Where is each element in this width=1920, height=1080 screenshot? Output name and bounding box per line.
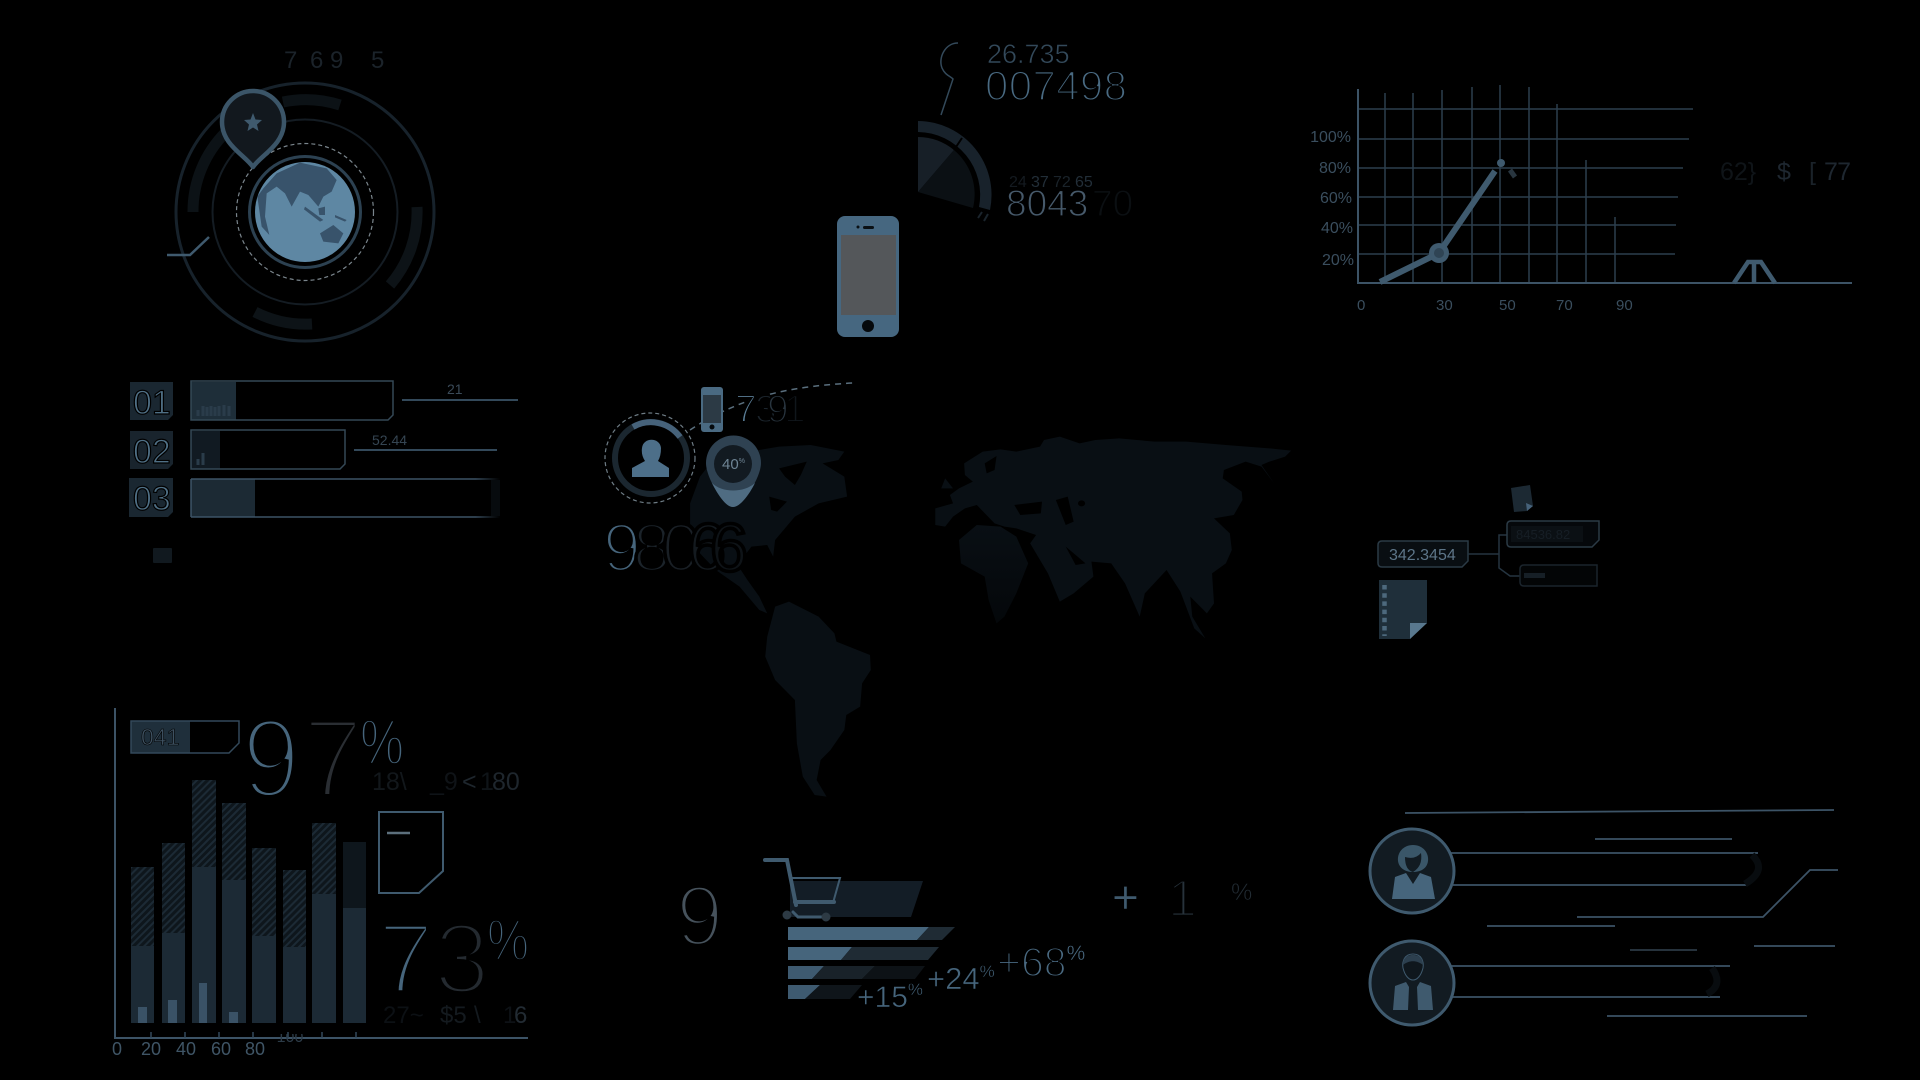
row 01: 21 xyxy=(447,381,463,397)
connector lines xyxy=(1405,810,1838,1016)
numbers: 98066: 6 xyxy=(710,510,748,586)
icon: percent pin xyxy=(706,435,761,507)
faint arcs xyxy=(1707,855,1759,994)
panel: phone and pie xyxy=(837,39,1133,337)
panel: data tree xyxy=(1378,485,1599,639)
numbers: 98066: 9 xyxy=(603,510,641,586)
x axis labels: 30 xyxy=(1436,297,1453,314)
stat: 73 percent: 3 xyxy=(434,903,490,1015)
backing parallelogram xyxy=(790,881,923,917)
numbers: 27 $5 16: $5 xyxy=(440,1002,467,1029)
hatched bars xyxy=(131,780,336,947)
stat: 97 percent: 7 xyxy=(303,696,363,821)
avatar: woman xyxy=(1370,829,1454,913)
numbers: 804370: 70 xyxy=(1092,183,1133,224)
numbers: 62} $ [ 77 xyxy=(1720,158,1851,186)
numbers: 791: 1 xyxy=(784,388,806,431)
pie gauge xyxy=(918,121,992,221)
numbers: 18 9 180: 80 xyxy=(492,768,520,796)
panel: ranked bars xyxy=(129,381,518,563)
counter: 7 6 9 5 xyxy=(284,47,384,74)
numbers: big 9: 9 xyxy=(676,869,723,964)
x axis labels: 40 xyxy=(176,1039,196,1059)
dashed route xyxy=(690,383,853,430)
stacked bars xyxy=(788,927,955,999)
row 02 xyxy=(130,430,497,471)
panel: bar chart stats xyxy=(112,696,529,1059)
stat: +24%: % xyxy=(980,962,995,981)
numbers: 62} $ [ 77: [ xyxy=(1809,158,1816,186)
icon: small note xyxy=(1511,485,1533,512)
icon: small smartphone xyxy=(701,387,723,432)
fading bar cap xyxy=(343,842,366,908)
stat: +15%: % xyxy=(908,980,923,999)
stat: +1x%: 1 xyxy=(1168,870,1197,928)
counter: 7 6 9 5: 5 xyxy=(371,47,384,74)
icon: person xyxy=(632,440,669,477)
axes xyxy=(115,708,528,1038)
x axis labels: 0 xyxy=(112,1039,122,1059)
stat: 73 percent: 7 xyxy=(378,903,434,1015)
axes xyxy=(1358,89,1852,283)
line chart panel xyxy=(1310,85,1852,314)
counter: 7 6 9 5: 7 xyxy=(284,47,297,74)
y axis labels xyxy=(1310,129,1354,269)
numbers: 98066: 0 xyxy=(662,510,700,586)
numbers: 804370 xyxy=(1006,183,1133,224)
clipped label: 100 xyxy=(277,1029,303,1046)
numbers: 791: 7 xyxy=(735,388,757,431)
panel: globe radar xyxy=(167,47,434,341)
icon: trapezoid marker xyxy=(1734,262,1775,283)
icon: notepad xyxy=(1379,580,1427,639)
stat: 97 percent: 9 xyxy=(242,696,300,821)
stat: 73 percent xyxy=(378,903,529,1015)
x axis labels xyxy=(1357,297,1633,314)
panel: shopping stats xyxy=(676,860,1252,1014)
numbers: 24 37 72 65 xyxy=(1009,174,1093,191)
x axis labels: 90 xyxy=(1616,297,1633,314)
numbers: 18 9 180: 1 xyxy=(480,768,494,796)
panel: user radial xyxy=(603,383,853,586)
data line xyxy=(1380,159,1515,282)
numbers: 24 37 72 65: 65 xyxy=(1075,174,1093,191)
numbers: 791: 3 xyxy=(755,388,777,431)
numbers: 791 xyxy=(735,388,806,431)
progress ring xyxy=(615,422,687,494)
numbers: 27 $5 16: 27~ xyxy=(383,1002,424,1029)
stat: +1x%: % xyxy=(1231,879,1252,906)
y axis labels: 20% xyxy=(1322,252,1354,269)
stat: +1x% xyxy=(1112,870,1252,928)
y axis labels: 60% xyxy=(1320,190,1352,207)
numbers: 804370: 8043 xyxy=(1006,183,1088,224)
row 03 xyxy=(129,478,500,518)
row 01: 01 xyxy=(133,384,171,422)
numbers: 18 9 180: 18\ xyxy=(372,768,407,796)
stat: +1x%: + xyxy=(1112,871,1139,923)
numbers: 791: 9 xyxy=(767,388,789,431)
counter: 7 6 9 5: 6 xyxy=(310,47,323,74)
icon: percent pin: 40 xyxy=(722,456,739,473)
connectors xyxy=(1468,535,1520,576)
numbers: 98066: 6 xyxy=(688,510,726,586)
row 02: 02 xyxy=(133,433,171,471)
numbers: 62} $ [ 77: 77 xyxy=(1824,158,1851,186)
dashed circle xyxy=(605,413,695,503)
stat: +15%: +15 xyxy=(857,981,908,1014)
x axis labels: 0 xyxy=(1357,297,1365,314)
numbers: 18 9 180: _9 xyxy=(429,768,458,796)
lower box xyxy=(1520,565,1597,586)
y axis labels: 100% xyxy=(1310,129,1351,146)
row 02: 52.44 xyxy=(372,432,407,448)
upper box: 84536.82 xyxy=(1516,527,1570,542)
y axis labels: 40% xyxy=(1321,220,1353,237)
callout line xyxy=(167,237,209,255)
ticks xyxy=(151,1032,356,1038)
y axis labels: 80% xyxy=(1319,160,1351,177)
icon: percent pin: % xyxy=(739,458,745,465)
icon: shopping cart xyxy=(765,860,840,921)
row 01 xyxy=(130,381,518,422)
numbers: 007498: 007498 xyxy=(985,62,1127,109)
callout hook xyxy=(941,43,958,115)
numbers: 27 $5 16: 1 xyxy=(503,1002,516,1029)
value box: 342.3454 xyxy=(1389,547,1456,564)
numbers: 62} $ [ 77: 62} xyxy=(1720,158,1756,186)
icon: document outline xyxy=(379,812,443,893)
solid bars xyxy=(131,867,366,1023)
numbers: 27 $5 16: \ xyxy=(474,1002,481,1029)
small square xyxy=(153,548,172,563)
numbers: 98066 xyxy=(603,510,748,586)
stat: +68%: % xyxy=(1067,942,1085,965)
orbit rings xyxy=(176,83,434,341)
stat: +24%: +24 xyxy=(927,961,980,996)
counter: 7 6 9 5: 9 xyxy=(330,47,343,74)
numbers: 24 37 72 65: 72 xyxy=(1053,174,1071,191)
lower box fill xyxy=(1524,573,1545,578)
icon: smartphone xyxy=(837,216,899,337)
x axis labels xyxy=(112,1039,265,1059)
icon: globe xyxy=(255,162,355,262)
tag 041 xyxy=(131,721,239,753)
numbers: 27 $5 16 xyxy=(383,1002,527,1029)
numbers: 24 37 72 65: 37 xyxy=(1031,174,1049,191)
grid xyxy=(1358,85,1693,283)
x axis labels: 60 xyxy=(211,1039,231,1059)
stat: 97 percent xyxy=(242,696,404,821)
numbers: 27 $5 16: 6 xyxy=(514,1002,527,1029)
x axis labels: 50 xyxy=(1499,297,1516,314)
icon: location pin with star xyxy=(222,91,284,167)
panel: users xyxy=(1370,810,1838,1025)
value box xyxy=(1378,541,1468,567)
x axis labels: 70 xyxy=(1556,297,1573,314)
world map xyxy=(690,437,1291,797)
stat: 73 percent: % xyxy=(487,908,529,973)
numbers: 18 9 180 xyxy=(372,768,520,796)
upper box xyxy=(1507,521,1599,547)
avatar: man xyxy=(1370,941,1454,1025)
numbers: 24 37 72 65: 24 xyxy=(1009,174,1027,191)
stat: +68%: +68 xyxy=(997,939,1067,985)
numbers: 98066: 8 xyxy=(633,510,671,586)
numbers: 62} $ [ 77: $ xyxy=(1777,158,1791,186)
row 03: 03 xyxy=(133,480,171,518)
x axis labels: 80 xyxy=(245,1039,265,1059)
tag 041: 041 xyxy=(141,724,179,750)
numbers: 26.735: 26.735 xyxy=(987,39,1070,69)
x axis labels: 20 xyxy=(141,1039,161,1059)
stat: 97 percent: % xyxy=(360,706,404,778)
highlight bars xyxy=(138,983,238,1023)
numbers: 18 9 180: < xyxy=(462,768,477,796)
